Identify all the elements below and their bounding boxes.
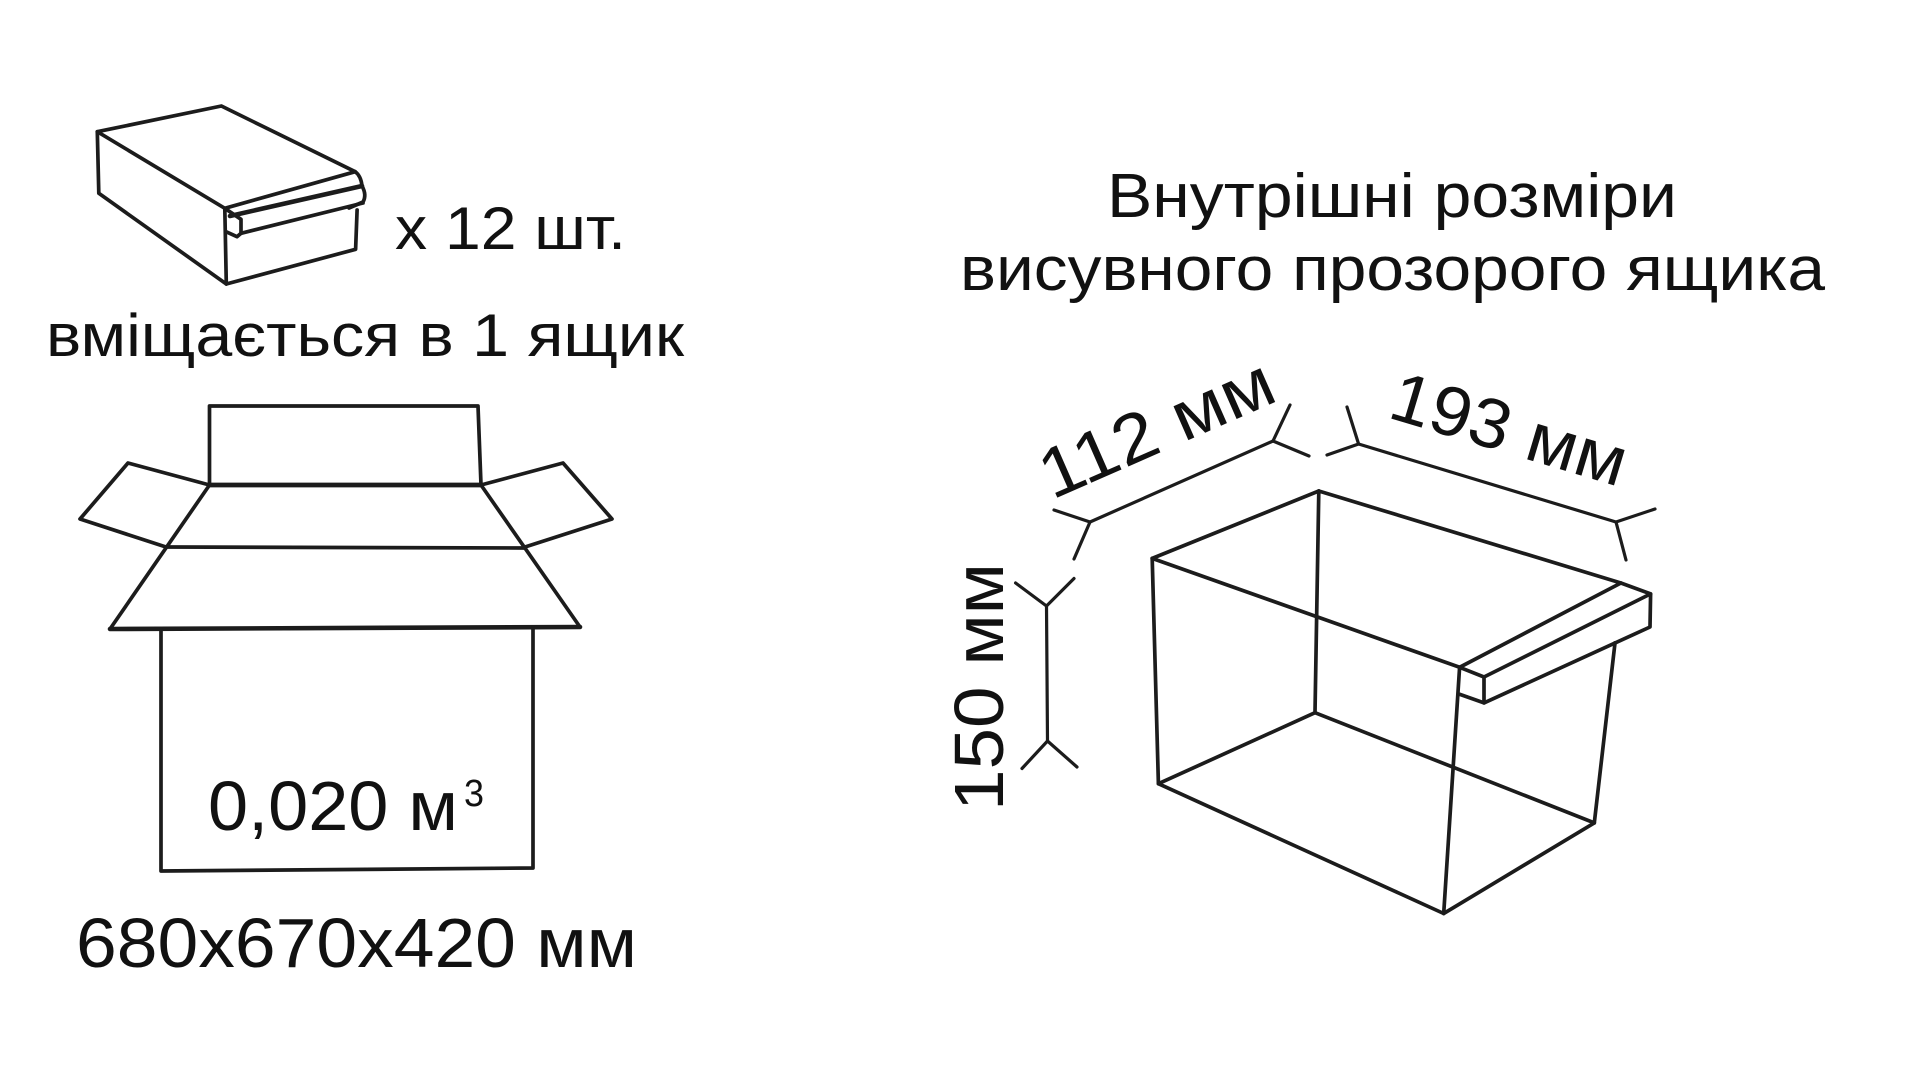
label: 150 mm: 150 мм	[940, 563, 1018, 811]
icon: small product box	[97, 106, 365, 284]
label: 112 mm: 112 мм	[1027, 342, 1286, 514]
panel: inner drawer dimensions	[940, 162, 1826, 914]
dimension line: height 150 mm	[1016, 578, 1077, 768]
icon: transparent drawer wireframe	[1152, 491, 1651, 914]
text: quantity: x 12 шт.	[395, 195, 626, 262]
heading: inner dimensions line 2: висувного прозорого ящика	[960, 235, 1826, 304]
heading: inner dimensions line 1: Внутрішні розміри	[1107, 162, 1677, 231]
text: volume: 0,020 м	[208, 767, 458, 845]
dimension line: width 193 mm	[1327, 407, 1655, 560]
dimension line: depth 112 mm	[1054, 405, 1309, 559]
panel: outer carton packing	[46, 106, 685, 982]
icon: open carton	[80, 406, 612, 871]
label: 193 mm: 193 мм	[1382, 357, 1637, 501]
text: carton dimensions: 680x670x420 мм	[76, 904, 637, 982]
text: volume exponent: 3	[464, 773, 484, 815]
text: fits in one carton: вміщається в 1 ящик	[46, 302, 685, 369]
